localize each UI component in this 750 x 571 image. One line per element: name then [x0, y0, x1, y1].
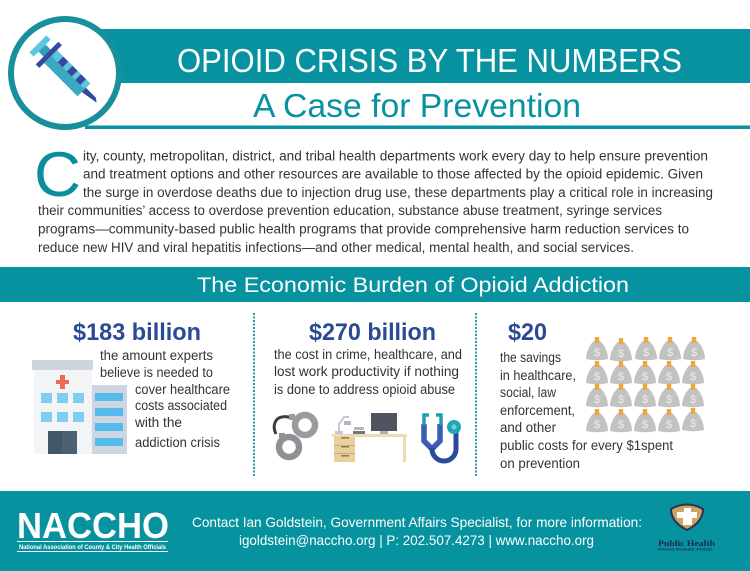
description: lost work productivity if nothing — [274, 364, 459, 379]
intro paragraph: their communities’ access to overdose prevention education, substance abuse treatment, syringe services — [38, 203, 662, 218]
description: cover healthcare — [135, 382, 230, 397]
description: public costs for every $1spent — [500, 438, 673, 453]
section band: economic burden: The Economic Burden of Opioid Addiction — [197, 274, 629, 297]
contact information — [192, 514, 642, 548]
description: addiction crisis — [135, 435, 220, 450]
panel: $20 savings — [500, 319, 705, 471]
title banner — [85, 29, 750, 129]
panel: $270 billion — [274, 319, 462, 462]
dotted divider — [475, 313, 477, 477]
description — [274, 347, 462, 397]
icon: money bags — [586, 337, 705, 432]
subtitle: A Case for Prevention — [253, 87, 581, 124]
intro paragraph: reduce new HIV and viral hepatitis infections—and other medical, mental health, and social services. — [38, 240, 634, 255]
figure: $183 billion: $183 billion — [73, 319, 201, 346]
description — [500, 350, 673, 471]
icon: hospital — [32, 360, 127, 454]
dotted divider — [253, 313, 255, 477]
description: the savings — [500, 350, 561, 365]
description: enforcement, — [500, 403, 575, 418]
logo: Public Health: Prevent. Promote. Protect. — [658, 548, 713, 552]
description: social, law — [500, 385, 556, 400]
description: the cost in crime, healthcare, and — [274, 347, 462, 362]
logo: Public Health: Public Health — [658, 539, 716, 548]
description: in healthcare, — [500, 368, 576, 383]
figure: $270 billion: $270 billion — [309, 319, 436, 346]
description: with the — [134, 415, 182, 430]
description: and other — [500, 420, 556, 435]
description: believe is needed to — [100, 365, 213, 380]
drop cap: C — [34, 140, 81, 210]
logo: Public Health — [658, 504, 716, 552]
intro paragraph: the surge in overdose deaths due to injection drug use, these departments play a critical role in increasing — [83, 185, 713, 200]
icon: handcuffs — [274, 414, 315, 457]
logo: NACCHO: National Association of County & City Health Officials — [19, 544, 166, 551]
title banner: OPIOID CRISIS BY THE NUMBERS — [177, 42, 682, 79]
description: on prevention — [500, 456, 580, 471]
description — [100, 348, 230, 450]
footer — [0, 491, 750, 571]
icon: stethoscope — [424, 415, 461, 461]
description: costs associated — [135, 398, 227, 413]
description: the amount experts — [100, 348, 213, 363]
icon: syringe in circle — [11, 19, 119, 127]
section band: economic burden — [0, 267, 750, 302]
contact information: Contact Ian Goldstein, Government Affairs Specialist, for more information: — [192, 514, 642, 530]
intro paragraph: and treatment options and other resources are available to those affected by the opioid epidemic. Given — [83, 166, 703, 182]
panel: $183 billion — [32, 319, 230, 454]
figure: $20: $20 — [508, 319, 547, 346]
intro paragraph — [34, 140, 713, 255]
description: is done to address opioid abuse — [274, 382, 455, 397]
icon: desk — [332, 413, 407, 462]
intro paragraph: ity, county, metropolitan, district, and tribal health departments work every day to help ensure prevention — [83, 148, 708, 164]
logo: NACCHO: NACCHO — [17, 505, 169, 546]
contact information: igoldstein@naccho.org | P: 202.507.4273 | www.naccho.org — [239, 532, 594, 548]
intro paragraph: programs—community-based public health programs that provide comprehensive harm reduction services to — [38, 222, 689, 236]
